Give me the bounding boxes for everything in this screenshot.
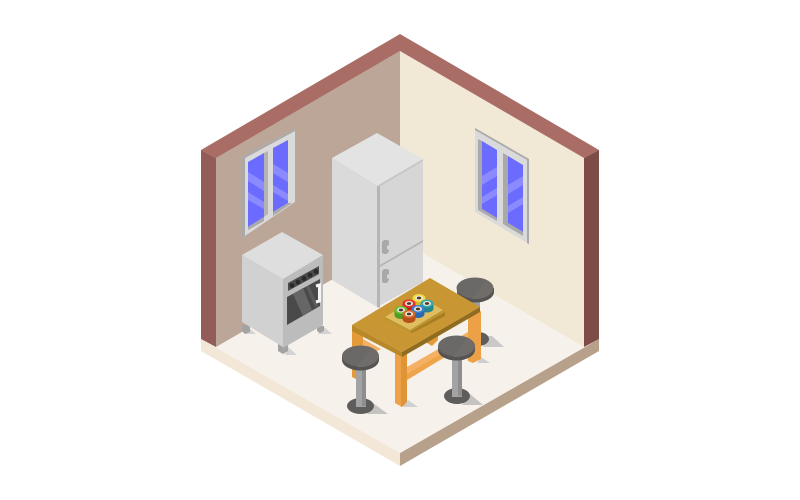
sushi rolls xyxy=(394,294,434,323)
oven door xyxy=(287,279,320,325)
floor slab xyxy=(201,240,599,466)
back walls xyxy=(216,51,584,347)
table front leg xyxy=(395,352,407,407)
sushi tray xyxy=(385,296,445,333)
oven xyxy=(242,232,332,355)
stool: front left xyxy=(342,346,388,414)
table left stretcher xyxy=(363,339,381,352)
stool: back xyxy=(456,278,504,347)
table left leg xyxy=(352,329,363,379)
table top xyxy=(352,325,402,357)
table back leg xyxy=(427,327,438,346)
outer wall edges xyxy=(201,34,599,347)
table front stretcher xyxy=(407,332,468,380)
oven controls xyxy=(288,266,319,291)
window: right wall xyxy=(475,128,529,244)
refrigerator xyxy=(332,133,423,308)
oven handle xyxy=(316,285,320,302)
table right leg xyxy=(477,357,490,363)
window: left wall xyxy=(242,129,295,238)
stool: front right xyxy=(438,336,483,405)
icon: fridge handles xyxy=(382,240,389,283)
table xyxy=(352,278,490,407)
